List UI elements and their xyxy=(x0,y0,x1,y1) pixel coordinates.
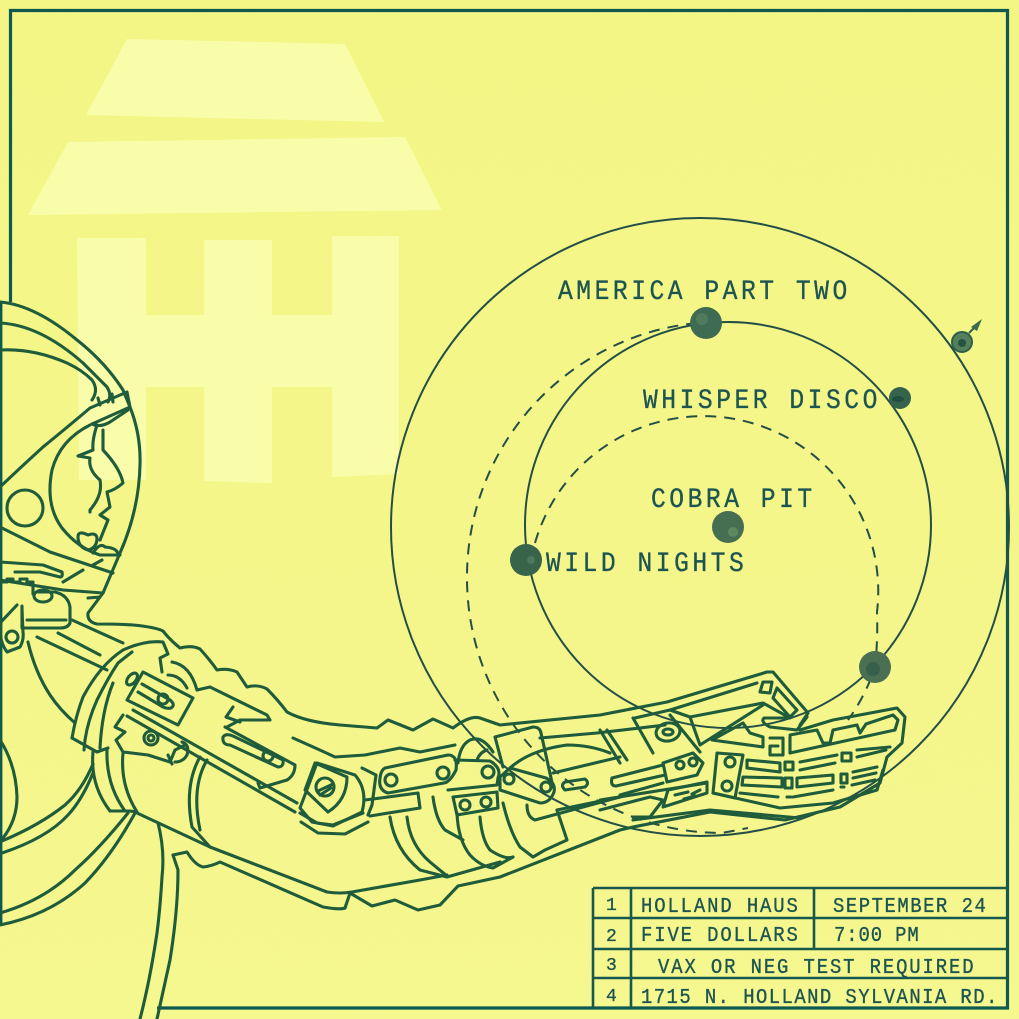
label: America Part Two: AMERICA PART TWO xyxy=(558,276,851,307)
elbow joint xyxy=(72,642,297,812)
robotic hand xyxy=(600,682,898,820)
table grid xyxy=(593,888,1008,1007)
collar mechanism xyxy=(0,579,340,725)
row 1: 1 xyxy=(606,896,617,916)
row 3: VAX OR NEG TEST REQUIRED xyxy=(658,955,975,979)
outer solid orbit xyxy=(391,218,1009,836)
row 2: FIVE DOLLARS xyxy=(641,923,800,947)
logo: pale house monogram xyxy=(28,39,442,483)
label: Wild Nights: WILD NIGHTS xyxy=(546,548,747,579)
row 2: 7:00 PM xyxy=(834,923,920,947)
shoulder scallop outline to wrist xyxy=(293,672,808,757)
planet with small rocket xyxy=(952,319,982,352)
helmet xyxy=(0,302,140,593)
row 1 xyxy=(606,894,987,918)
label: Whisper Disco: WHISPER DISCO xyxy=(643,385,881,416)
planet: Cobra Pit xyxy=(712,511,744,543)
astronaut line drawing xyxy=(0,302,905,1019)
inner dashed orbit xyxy=(535,416,878,720)
row 3: 3 xyxy=(606,956,617,976)
shield joint xyxy=(300,763,368,834)
face profile xyxy=(78,425,123,540)
row 2 xyxy=(606,923,920,947)
row 4: 4 xyxy=(606,987,617,1007)
planet: Whisper Disco xyxy=(889,387,911,409)
info table xyxy=(593,888,1008,1009)
planet: America Part Two xyxy=(690,307,722,339)
row 1: HOLLAND HAUS xyxy=(641,894,800,918)
row 1: SEPTEMBER 24 xyxy=(833,894,987,918)
upper arm tubes xyxy=(0,620,135,925)
row 2: 2 xyxy=(606,927,617,947)
row 4: 1715 N. HOLLAND SYLVANIA RD. xyxy=(641,985,999,1009)
planet: Wild Nights xyxy=(510,544,542,576)
wrist cuffs xyxy=(390,725,665,877)
forearm plates xyxy=(137,687,905,910)
middle solid orbit xyxy=(525,322,931,728)
orbital diagram xyxy=(391,218,1009,836)
torso lines xyxy=(140,823,178,1019)
planet: lower right xyxy=(859,651,891,683)
label: Cobra Pit: COBRA PIT xyxy=(651,484,816,515)
wrist links xyxy=(362,755,554,816)
outer dashed orbit xyxy=(467,323,748,833)
